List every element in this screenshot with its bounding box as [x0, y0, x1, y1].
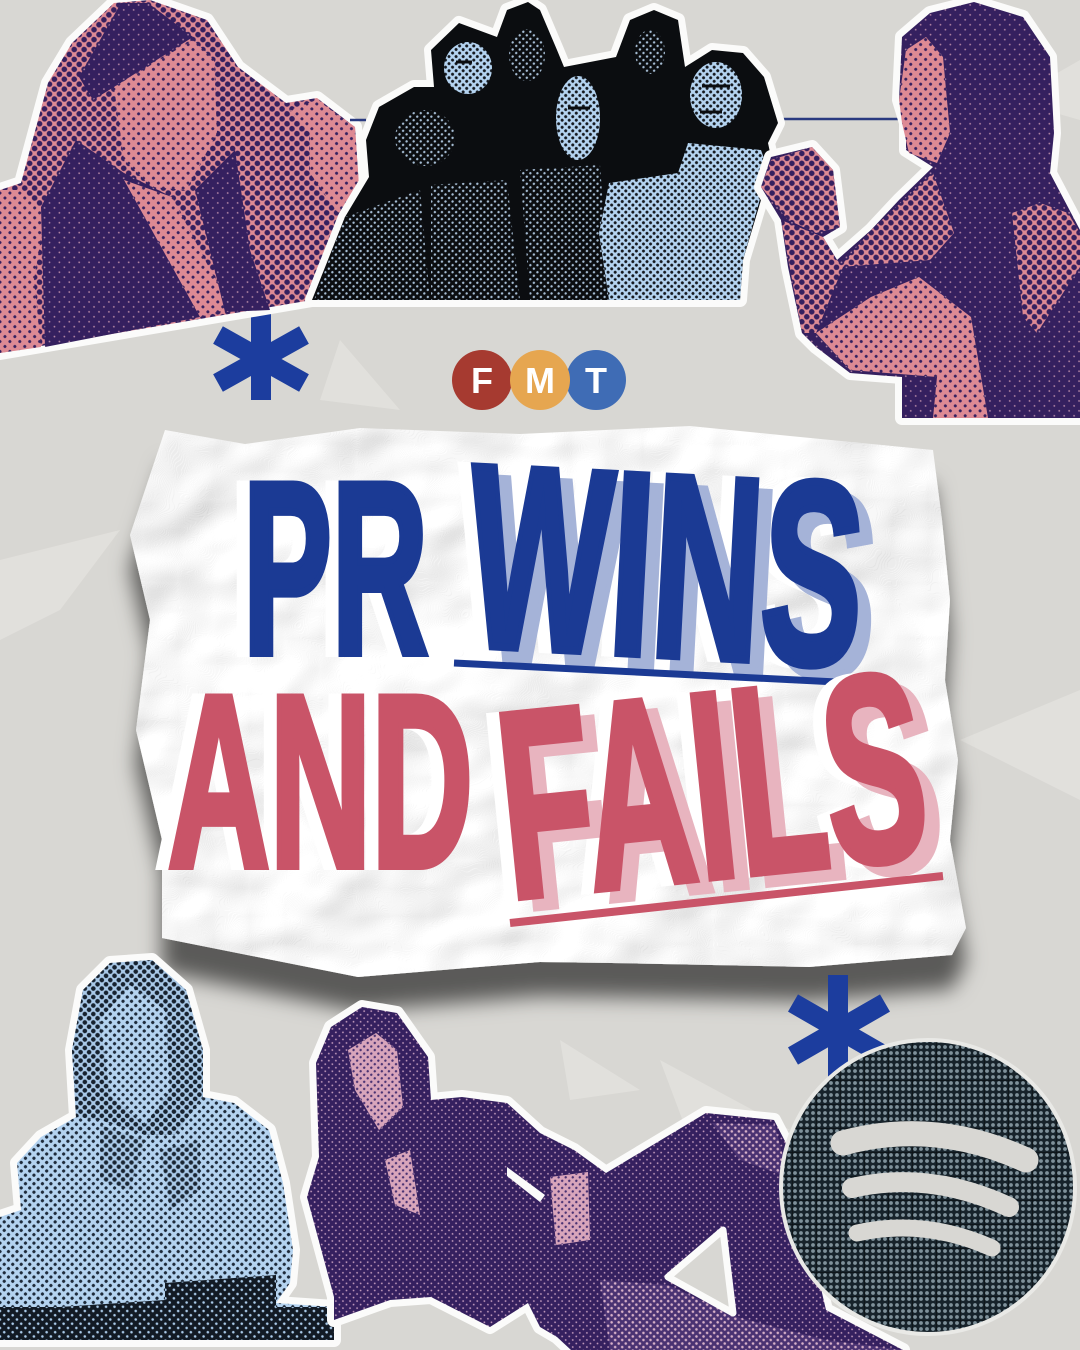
heading word: PR — [230, 431, 428, 705]
logo: FMT: F — [471, 360, 493, 401]
logo: FMT — [452, 350, 626, 410]
accent line: top left — [350, 119, 366, 121]
panel: crumpled paper — [130, 426, 966, 977]
heading word: AND: AND — [168, 644, 473, 918]
accent line: top right — [782, 118, 902, 120]
heading word: AND — [155, 644, 473, 918]
photo: five-member group in dark halftone, top centre — [312, 2, 778, 300]
logo: FMT: T — [585, 360, 607, 401]
photo: woman in pale blue shirt, bottom left — [0, 960, 334, 1340]
photo: woman with raised fist, top right — [761, 2, 1080, 418]
heading word: AND: AND — [155, 644, 460, 918]
underline: FAILS — [510, 876, 943, 923]
logo: FMT: M — [525, 360, 555, 401]
photo: woman with pink halftone, top left — [0, 0, 359, 353]
asterisk: bottom right — [793, 975, 885, 1085]
photo: reclining woman in purple, bottom centre — [307, 1007, 903, 1350]
icon: Spotify logo — [781, 1040, 1075, 1334]
title: PR WINS AND FAILS — [155, 411, 954, 968]
heading word: PR: PR — [230, 431, 415, 705]
underline: WINS — [454, 663, 877, 684]
heading word: PR: PR — [243, 431, 428, 705]
asterisk: top left — [218, 300, 304, 400]
heading word: WINS — [448, 411, 885, 733]
